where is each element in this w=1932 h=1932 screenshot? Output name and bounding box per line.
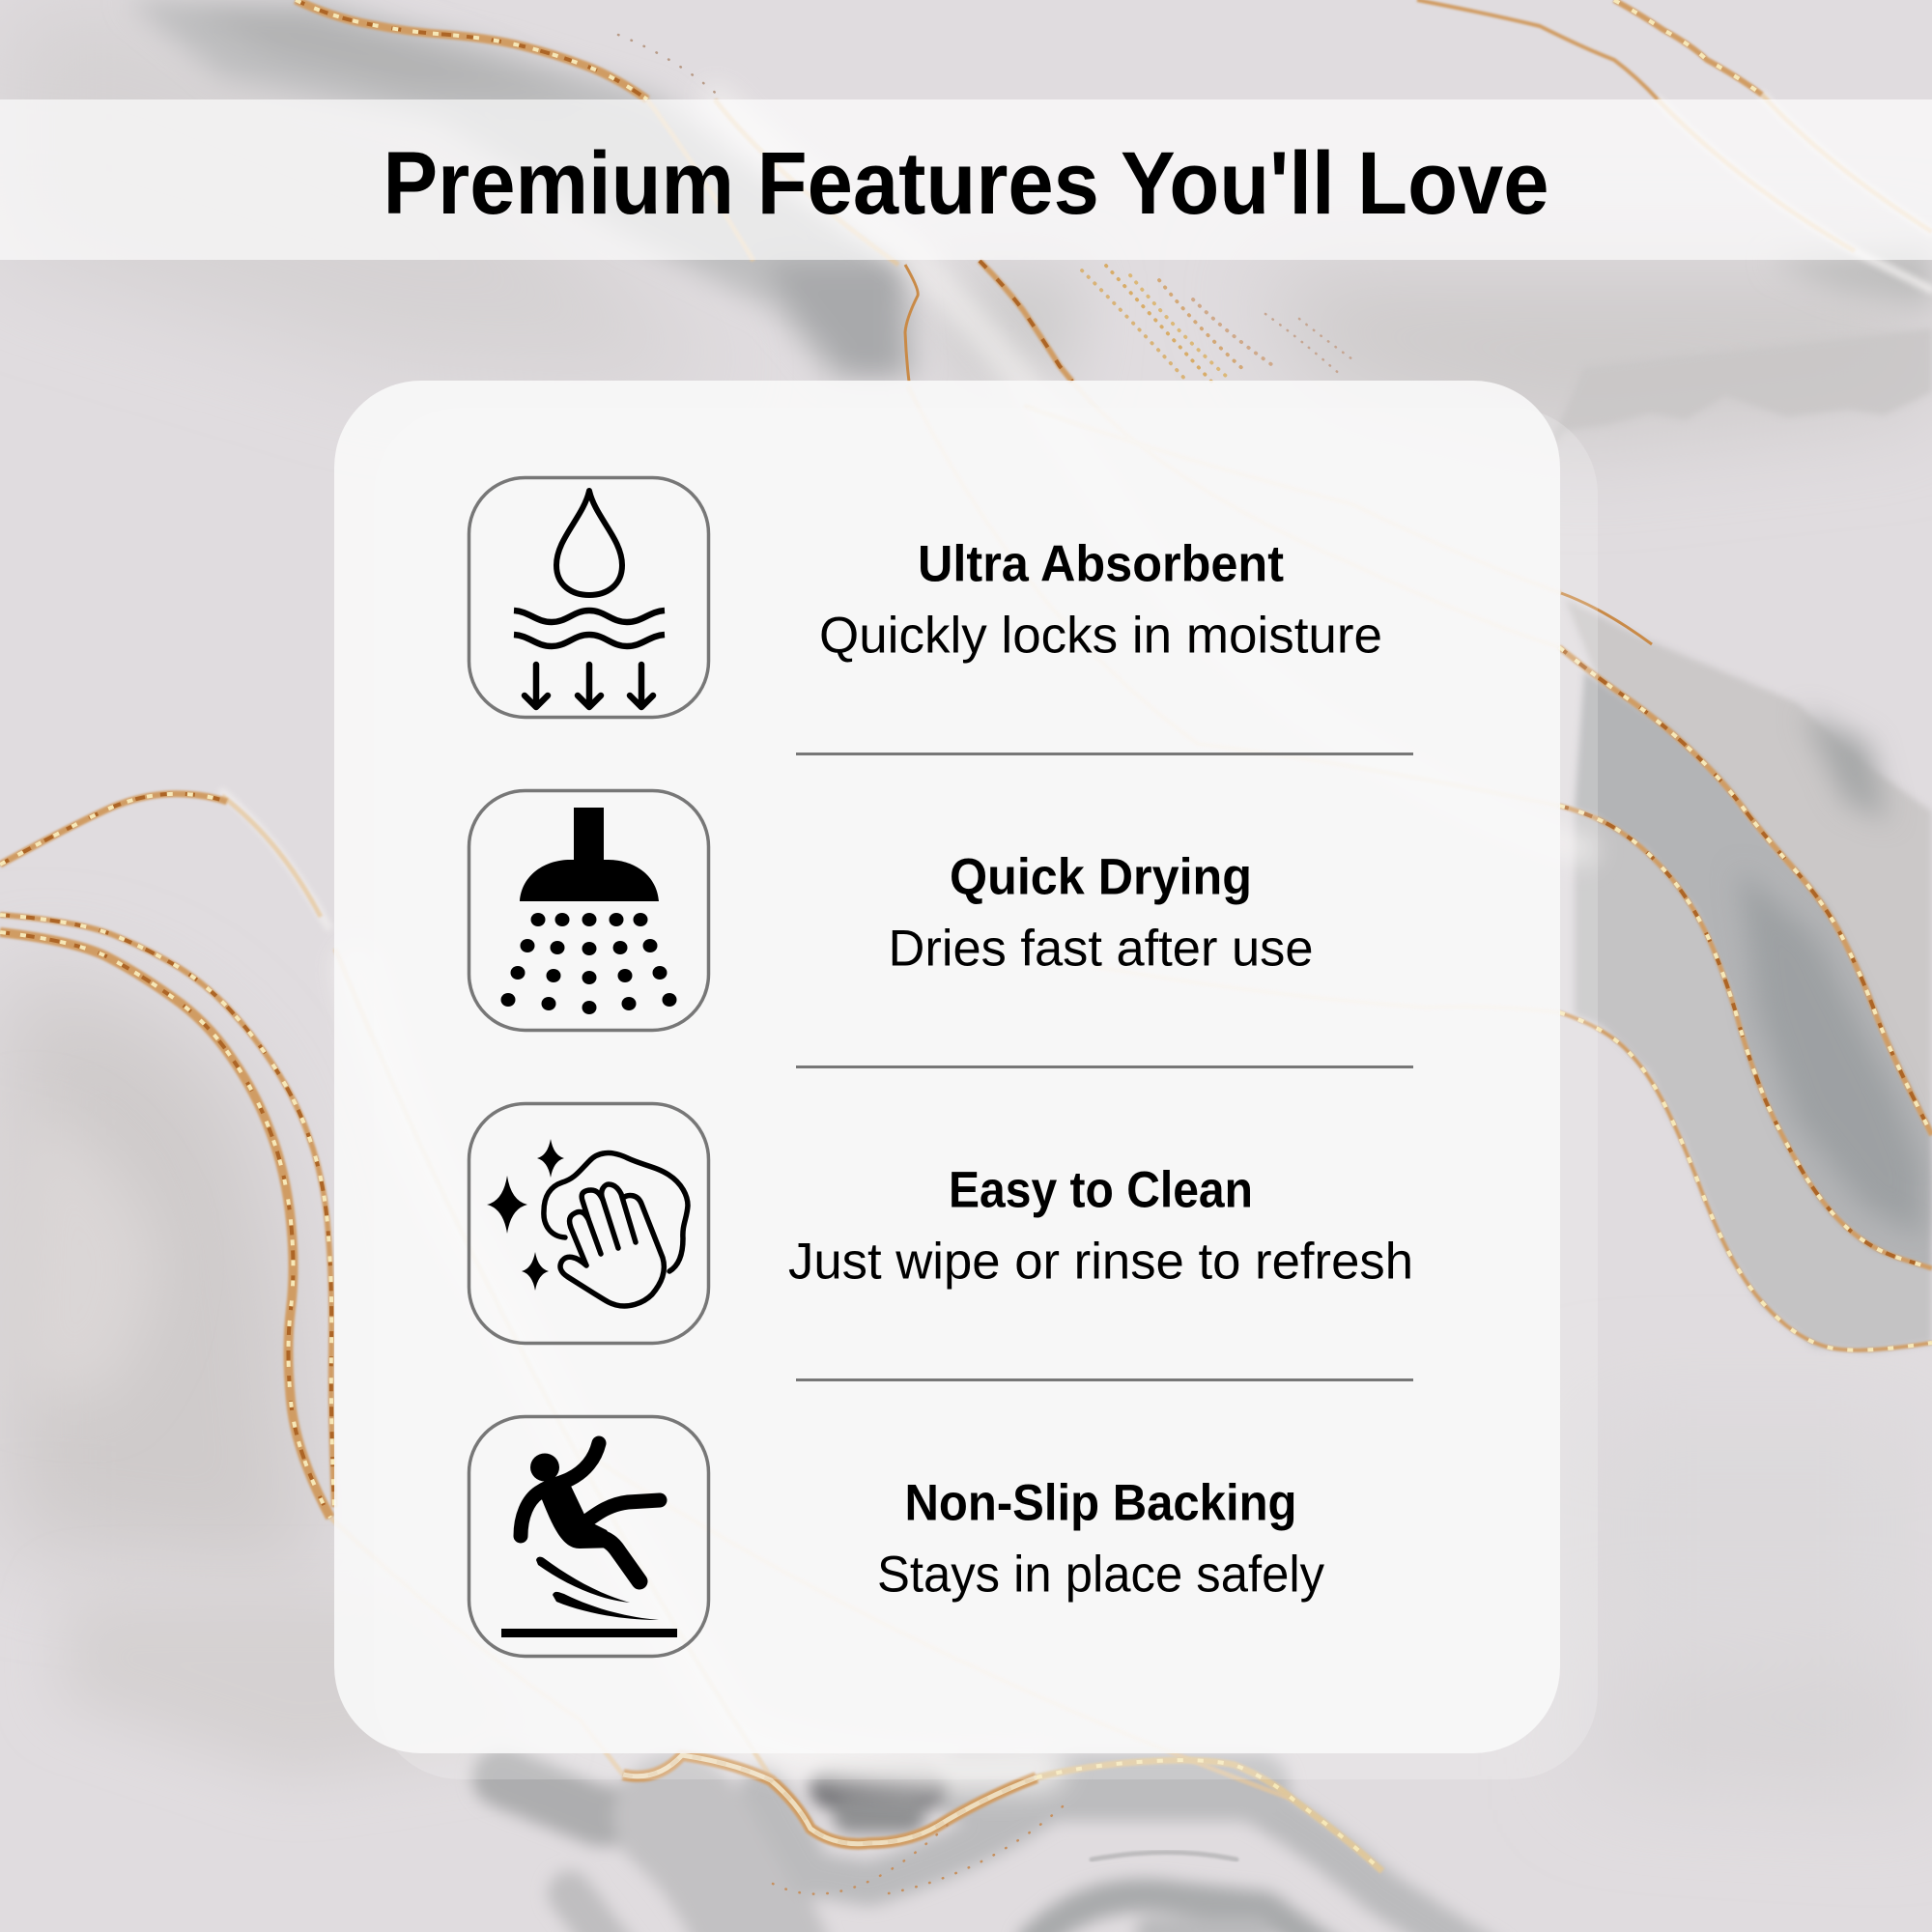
- front panel: [334, 381, 1560, 1753]
- back panel: [374, 408, 1598, 1779]
- feature: non-slip backing: [469, 1416, 1324, 1656]
- heading: Quick Drying: [950, 848, 1252, 906]
- feature: easy to clean: [469, 1103, 1413, 1343]
- feature: ultra absorbent: [469, 477, 1382, 717]
- icon: slipping figure: [469, 1416, 709, 1656]
- cream veins running beneath the panels: [222, 95, 1932, 1800]
- header band: [0, 99, 1932, 260]
- heading: Ultra Absorbent: [918, 535, 1284, 593]
- icon: absorbent drop: [469, 477, 709, 717]
- grey diagonal stripe upper left: [126, 0, 1932, 379]
- right ridged wash: [1546, 328, 1932, 1352]
- icon: shower head: [469, 790, 709, 1030]
- heading: Easy to Clean: [949, 1161, 1253, 1219]
- description: Dries fast after use: [889, 920, 1314, 978]
- description: Quickly locks in moisture: [819, 607, 1382, 665]
- description: Stays in place safely: [877, 1546, 1324, 1604]
- icon: hand wiping with sparkles: [469, 1103, 709, 1343]
- description: Just wipe or rinse to refresh: [788, 1233, 1413, 1291]
- title: Premium Features You'll Love: [383, 134, 1549, 233]
- heading: Non-Slip Backing: [904, 1474, 1296, 1532]
- feature: quick drying: [469, 790, 1314, 1030]
- bottom marble bands: [502, 1777, 1488, 1932]
- gold speckle clusters: [618, 35, 1352, 1894]
- white flows: [222, 95, 1932, 1770]
